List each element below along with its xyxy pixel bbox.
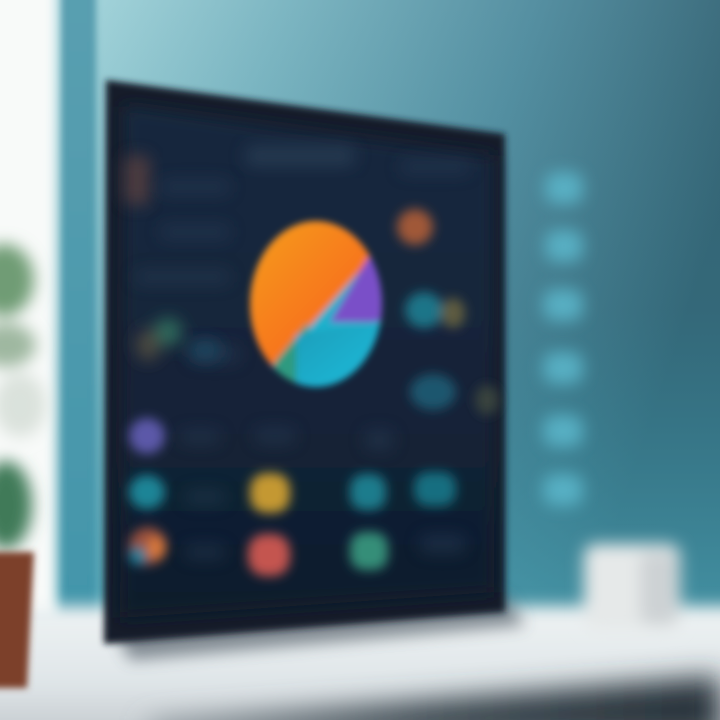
bottom tile icons xyxy=(248,472,456,576)
left mid swatches xyxy=(136,318,221,361)
monitor xyxy=(104,80,525,660)
pie slice green xyxy=(270,322,308,395)
monitor shadow xyxy=(112,595,525,660)
pie slice orange xyxy=(244,215,375,372)
left column smudges xyxy=(135,160,470,363)
pie slice purple xyxy=(330,258,395,322)
mug on desk xyxy=(584,544,680,630)
window light left xyxy=(0,0,56,620)
monitor screen xyxy=(120,106,494,618)
top left swatch xyxy=(124,155,150,205)
plant leaves xyxy=(0,244,46,549)
bottom left stack icons xyxy=(129,418,167,565)
wall indicator dots right xyxy=(543,172,583,506)
monitor frame xyxy=(104,80,505,644)
pie base xyxy=(250,221,382,387)
screen title smudge xyxy=(245,145,355,167)
plant xyxy=(0,244,46,688)
desk surface xyxy=(0,606,720,720)
pie slice teal xyxy=(290,329,337,387)
plant pot xyxy=(0,552,34,688)
bottom text smudges xyxy=(180,428,465,559)
wall stripe left xyxy=(60,0,96,620)
pie chart xyxy=(244,216,387,392)
right chart swatches xyxy=(397,209,499,415)
